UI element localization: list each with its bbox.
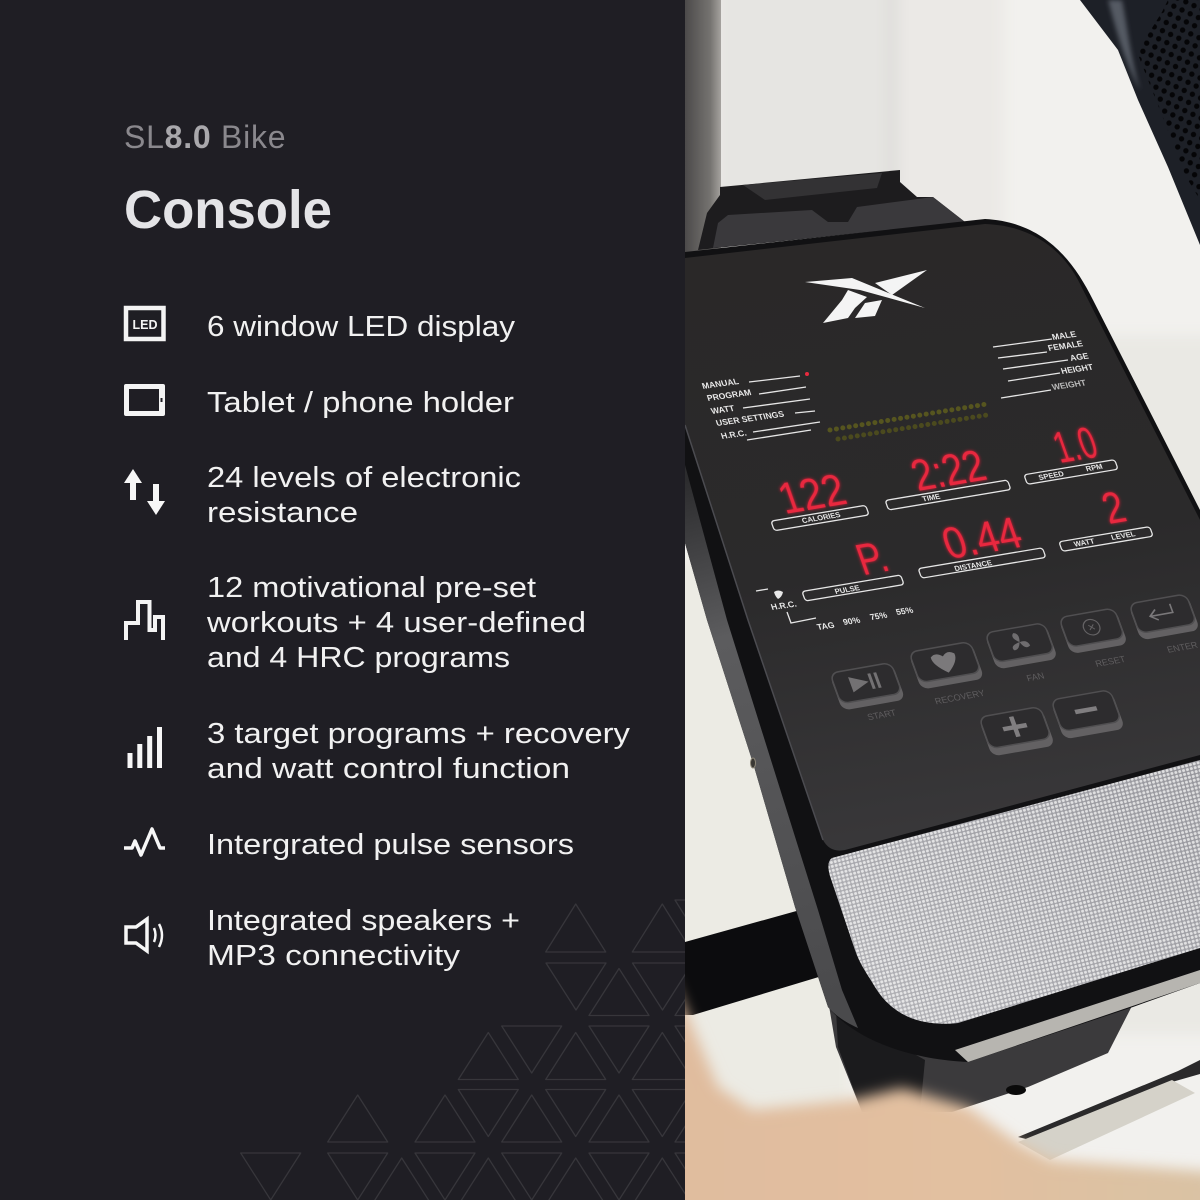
readout: time <box>885 448 1011 510</box>
text: speakers and MP3: Integrated speakers + <box>207 905 520 937</box>
readout: level: WATT <box>1072 537 1096 549</box>
feature: electronic resistance <box>124 462 521 529</box>
decorative triangle pattern <box>241 900 735 1200</box>
left menu labels: WATT <box>710 403 737 416</box>
button: reset <box>1060 608 1126 667</box>
readout: distance: 0.44 <box>935 507 1028 568</box>
left menu labels: USER SETTINGS <box>715 409 786 428</box>
text: tablet / phone holder: Tablet / phone holder <box>207 387 514 419</box>
text: 6 window LED display: 6 window LED display <box>207 311 516 343</box>
left menu labels: PROGRAM <box>706 387 752 403</box>
handlebar with perforation <box>1080 0 1200 245</box>
button: recovery: RECOVERY <box>933 688 986 706</box>
left menu labels <box>701 372 820 441</box>
button: start <box>832 663 904 720</box>
readout: level <box>1059 490 1153 552</box>
button: fan: FAN <box>1025 671 1046 683</box>
readout: speed <box>1024 425 1118 484</box>
panel: dark feature background <box>0 0 685 1200</box>
console outer frame <box>685 219 1200 1062</box>
icon: signal bars <box>128 727 162 768</box>
right profile labels: AGE <box>1069 351 1090 363</box>
icon: LED screen: LED <box>132 318 158 332</box>
feature: LED display <box>126 308 516 343</box>
readout: calories: CALORIES <box>801 510 842 525</box>
text: target programs: 3 target programs + recovery <box>207 718 631 750</box>
feature: tablet holder <box>124 384 514 419</box>
text: workout programs: and 4 HRC programs <box>207 642 510 674</box>
icon: LED screen <box>126 308 164 339</box>
base support <box>1018 1060 1200 1160</box>
heart rate zones: TAG <box>816 620 836 632</box>
button: enter <box>1130 594 1198 652</box>
readout: calories: 122 <box>771 464 852 523</box>
text: pulse sensors: Intergrated pulse sensors <box>207 829 574 861</box>
title: Console <box>124 180 332 240</box>
speaker grille <box>828 760 1200 1024</box>
button: start: START <box>866 708 898 722</box>
text: speakers and MP3: MP3 connectivity <box>207 940 461 972</box>
button: reset: RESET <box>1094 654 1127 669</box>
button: recovery <box>910 642 983 704</box>
LED dot matrix <box>830 404 987 439</box>
right profile labels <box>993 329 1095 398</box>
feature: speakers <box>126 905 520 972</box>
readout: level: 2 <box>1095 482 1132 533</box>
readout: pulse <box>802 541 904 602</box>
text: resistance levels: 24 levels of electronic <box>207 462 521 494</box>
left menu labels: H.R.C. <box>720 428 748 441</box>
readout: pulse: PULSE <box>833 583 861 596</box>
button: minus <box>1050 689 1125 739</box>
eyebrow: product name: SL8.0 Bike <box>124 119 286 155</box>
icon: up and down arrows <box>124 469 165 515</box>
right profile labels: FEMALE <box>1047 338 1084 353</box>
readout: pulse: P. <box>849 531 895 584</box>
text: workout programs: 12 motivational pre-set <box>207 572 536 604</box>
left crossbar <box>685 910 822 1015</box>
icon: workout profile <box>126 602 163 640</box>
heart rate zones <box>756 589 915 632</box>
feature: workouts <box>126 572 586 674</box>
icon: tablet <box>124 384 165 416</box>
lower bracket <box>828 1000 1135 1112</box>
button: plus <box>978 706 1055 757</box>
feature: target programs <box>128 718 631 785</box>
heart rate zones: H.R.C. <box>770 599 798 612</box>
readout: speed: RPM <box>1084 462 1104 473</box>
right profile labels: WEIGHT <box>1051 378 1088 392</box>
button: enter: ENTER <box>1166 640 1200 655</box>
panel: console photograph <box>670 0 1200 1200</box>
readout: speed: 1.0 <box>1046 417 1104 472</box>
readout: distance <box>918 516 1046 578</box>
readout: time: 2:22 <box>904 440 992 500</box>
foreground hand <box>670 975 1200 1200</box>
readout: level: LEVEL <box>1110 529 1137 542</box>
button: fan <box>986 623 1056 682</box>
heart rate zones: 55% <box>895 605 915 617</box>
photo background <box>670 0 1200 1200</box>
console face panel <box>685 224 1200 851</box>
feature: pulse sensors <box>124 829 574 861</box>
heart rate zones: 75% <box>869 610 889 622</box>
readout: time: TIME <box>921 492 941 503</box>
right profile labels: HEIGHT <box>1060 362 1095 376</box>
text: workout programs: workouts + 4 user-defined <box>206 607 586 639</box>
readout: speed: SPEED <box>1037 469 1066 482</box>
icon: pulse line <box>124 829 165 855</box>
tablet holder <box>698 170 965 250</box>
icon: speaker <box>126 919 162 951</box>
readout: distance: DISTANCE <box>953 558 993 573</box>
right profile labels: MALE <box>1051 329 1078 342</box>
text: target programs: and watt control function <box>207 753 570 785</box>
heart rate zones: 90% <box>842 615 862 627</box>
left menu labels: MANUAL <box>701 376 740 391</box>
logo: Reebok delta <box>805 270 927 323</box>
text: resistance levels: resistance <box>207 497 358 529</box>
